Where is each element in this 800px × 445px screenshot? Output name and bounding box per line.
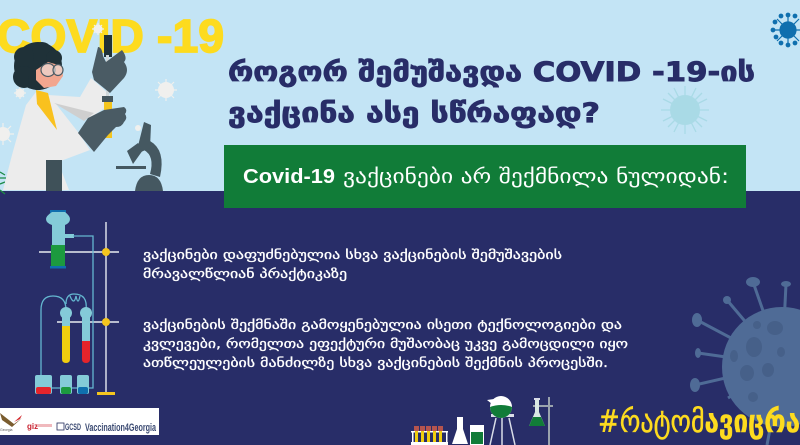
- logo: GCSD: GCSD: [65, 422, 81, 432]
- logo: swoosh: [0, 413, 22, 427]
- banner text: georgian part: ვაქცინები არ შექმნილა ნულიდან:: [343, 164, 729, 188]
- icon: pale teal virus: [661, 86, 709, 134]
- icon: microscope: [116, 122, 163, 191]
- title: [228, 57, 755, 129]
- banner text: latin part: Covid-19: [243, 166, 335, 188]
- hair: [13, 42, 62, 90]
- logo: GCSD: [57, 422, 81, 432]
- upper glove: [92, 47, 127, 93]
- title: ვაქცინა ასე სწრაფად?: [228, 98, 600, 129]
- face: [36, 62, 63, 88]
- logo strip: [0, 408, 159, 435]
- logo: Vaccination4Georgia: Vaccination4Georgia: [85, 422, 157, 434]
- goggles: [41, 64, 63, 76]
- illustration: scientist: [3, 35, 127, 191]
- icon: large virus: [690, 277, 800, 445]
- trousers: [46, 160, 62, 191]
- lower glove: [78, 107, 126, 152]
- text block: second point: ვაქცინების შექმნაში გამოყენებულია ისეთი ტექნოლოგიები და: [143, 318, 622, 333]
- text block: second point: კვლევები, რომელთა ეფექტური მუშაობაც უკვე გამოცდილი იყო: [143, 337, 628, 352]
- text block: second point: [143, 318, 628, 371]
- icon: green virus fragment: [0, 172, 6, 194]
- logo: giz: giz: [27, 422, 38, 431]
- bottom navy panel: [0, 191, 800, 445]
- green banner: [224, 145, 746, 208]
- icon: lab glassware: [411, 396, 553, 445]
- icon: laboratory apparatus: [35, 210, 119, 395]
- icon: small pale viruses: [0, 23, 177, 145]
- coat shadow: [54, 103, 94, 121]
- text block: first point: ვაქცინები დაფუძნებულია სხვა ვაქცინების შემუშავების: [143, 248, 562, 263]
- yellow shirt: [36, 90, 57, 130]
- coat: [3, 78, 110, 190]
- text block: first point: [143, 248, 562, 282]
- test tube: [104, 35, 112, 57]
- text block: second point: ათწლეულების მანძილზე სხვა ვაქცინების შექმნის პროცესში.: [143, 356, 608, 371]
- large yellow heading: COVID -19: [0, 10, 224, 62]
- title: როგორ შემუშავდა COVID -19-ის: [228, 57, 755, 88]
- top light blue background: [0, 0, 800, 191]
- icon: blue virus: [771, 13, 800, 47]
- logo strip: Georgia: [0, 428, 13, 432]
- text block: first point: მრავალწლიან პრაქტიკაზე: [143, 267, 347, 282]
